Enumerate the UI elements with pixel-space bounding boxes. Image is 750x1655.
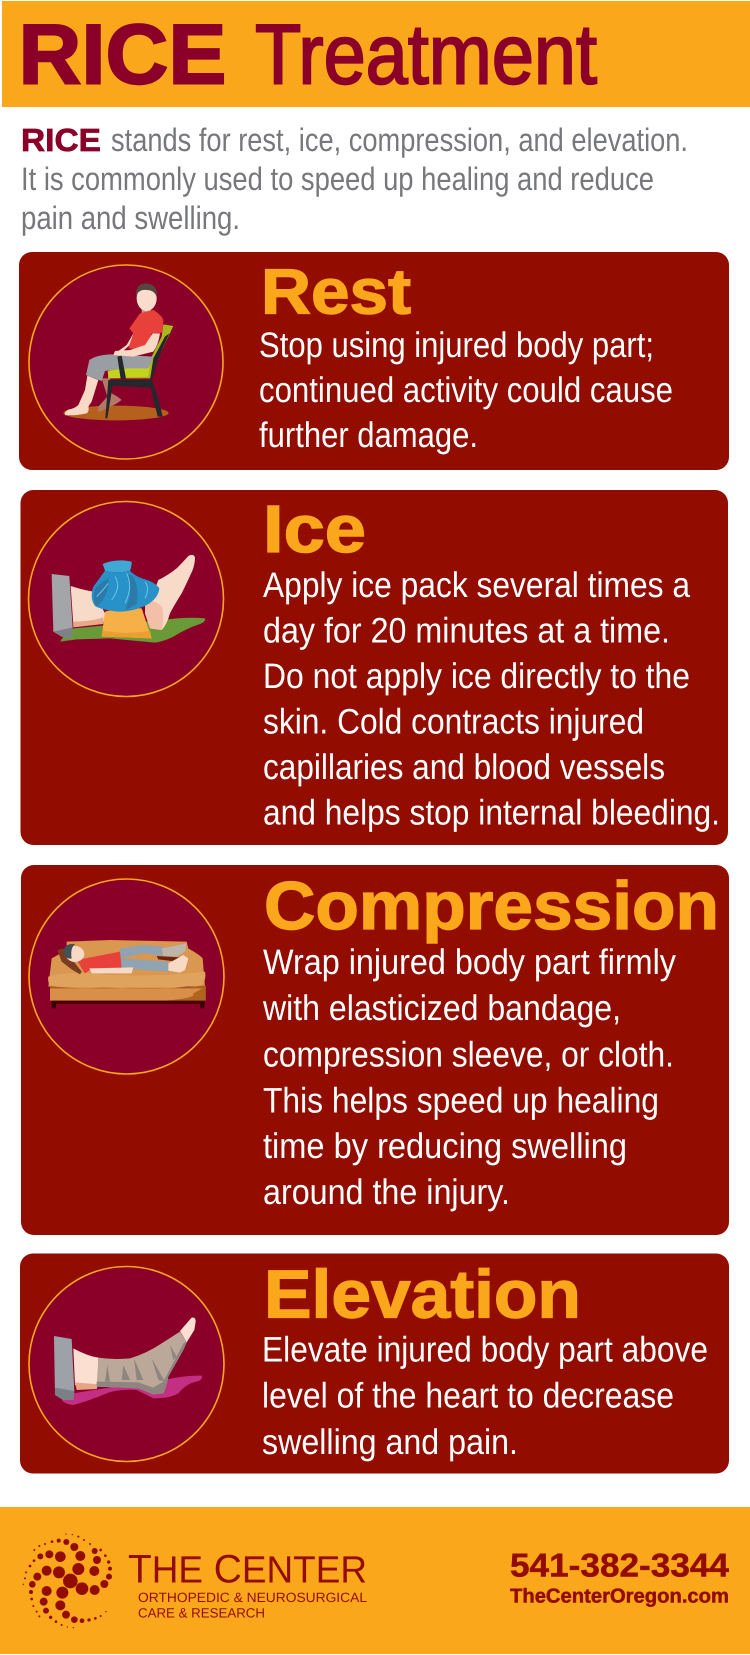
body: elevation: swelling and pain. [262,1422,518,1462]
body: ice: Apply ice pack several times a [263,565,690,605]
logo wordmark: THE CENTER [128,1548,367,1592]
footer banner [0,1507,750,1654]
body: ice: capillaries and blood vessels [263,747,665,787]
logo wordmark: ORTHOPEDIC & NEUROSURGICAL [138,1590,367,1605]
icon circle: bandaged elevated leg [29,1266,224,1462]
intro text [21,122,688,236]
body: ice [263,565,720,832]
body: elevation: Elevate injured body part above [262,1330,708,1370]
body: compression: around the injury. [263,1172,510,1212]
logo wordmark: CARE & RESEARCH [138,1606,265,1620]
header banner [2,1,750,107]
intro text: RICE [21,122,101,158]
icon circle: person sitting on chair [29,265,223,459]
title [18,8,597,102]
body: compression: This helps speed up healing [263,1080,659,1120]
body: ice: day for 20 minutes at a time. [263,610,670,650]
body: ice: Do not apply ice directly to the [263,656,690,696]
body: rest: further damage. [259,415,478,455]
panel: rest [19,252,729,470]
body: rest: Stop using injured body part; [259,325,654,365]
body: elevation: level of the heart to decrease [262,1376,674,1416]
contact details: TheCenterOregon.com [510,1586,729,1608]
heading: Rest: Rest [261,256,411,328]
body: compression: time by reducing swelling [263,1126,627,1166]
body: compression [262,942,676,1212]
panel: elevation [20,1254,729,1474]
heading: Elevation: Elevation [264,1256,581,1332]
body: compression: compression sleeve, or cloth. [263,1034,674,1074]
body: compression: Wrap injured body part firmly [263,942,676,982]
contact details [510,1546,730,1608]
body: ice: skin. Cold contracts injured [263,702,644,742]
icon circle: ice pack on raised leg [28,502,224,696]
contact details: 541-382-3344 [510,1546,730,1584]
icon circle: person lying on sofa [29,879,224,1074]
logo wordmark [128,1548,367,1620]
panel: ice [20,490,728,845]
logo: dotted spiral [23,1533,112,1628]
panel: compression [21,865,729,1235]
title: RICE [18,8,226,102]
intro text: pain and swelling. [21,200,240,236]
title: Treatment [255,8,597,102]
heading: Ice: Ice [263,492,366,567]
body: compression: with elasticized bandage, [262,988,621,1028]
heading: Compression: Compression [264,868,719,944]
body: rest [259,325,673,455]
body: rest: continued activity could cause [259,370,673,410]
body: elevation [262,1330,708,1462]
